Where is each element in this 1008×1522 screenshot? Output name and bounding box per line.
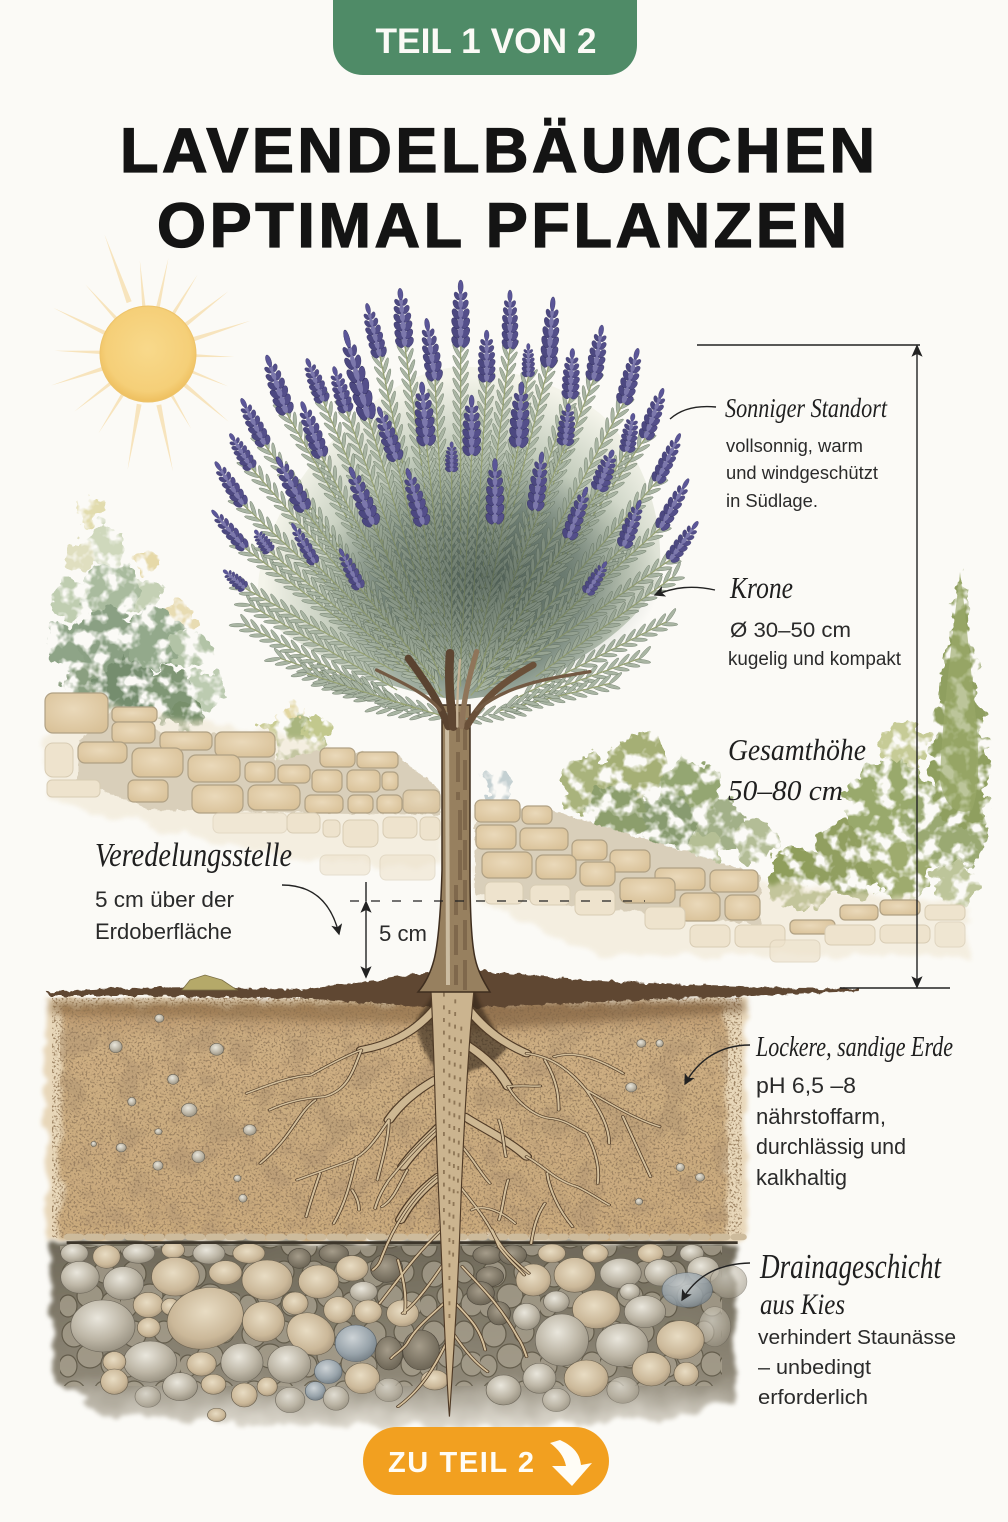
callout: Krone: kugelig und kompakt (728, 649, 902, 670)
button: Zu Teil 2: ZU TEIL 2 (388, 1447, 534, 1479)
button: Zu Teil 2 (363, 1427, 609, 1495)
callout: Gesamthöhe: Gesamthöhe (728, 732, 866, 767)
pebble divider line (67, 1237, 742, 1243)
icon: sun (50, 234, 251, 472)
callout: Gesamthöhe: 50–80 cm (728, 776, 843, 807)
callout: Sonniger Standort: Sonniger Standort (725, 393, 888, 423)
trunk (418, 705, 490, 992)
callout: Drainageschicht aus Kies (682, 1247, 956, 1409)
icon: curved arrow (550, 1440, 592, 1486)
title: OPTIMAL PFLANZEN (157, 191, 847, 261)
callout: Sonniger Standort: und windgeschützt (726, 462, 878, 483)
background: stone wall left (45, 693, 440, 880)
gravel stones (61, 1237, 747, 1422)
callout: Drainageschicht aus Kies: aus Kies (760, 1288, 845, 1321)
callout: Sonniger Standort: vollsonnig, warm (726, 435, 863, 456)
lavender crown (206, 280, 705, 729)
background: small bush (263, 704, 327, 772)
callout: Veredelungsstelle: 5 cm über der (95, 887, 234, 912)
crown foliage mass (258, 367, 660, 700)
callout: Lockere, sandige Erde: durchlässig und (756, 1134, 906, 1159)
roots (247, 953, 660, 1417)
callout: Krone: Krone (729, 570, 793, 605)
graft height marker: 5 cm: 5 cm (379, 921, 427, 946)
background: stone wall right (475, 800, 970, 962)
title (120, 116, 875, 261)
badge: Teil 1 von 2: TEIL 1 VON 2 (376, 22, 596, 61)
callout: Lockere, sandige Erde: pH 6,5 –8 (756, 1073, 856, 1098)
callout: Drainageschicht aus Kies: erforderlich (758, 1386, 868, 1409)
gravel drainage layer (48, 1237, 747, 1428)
leafy stems (226, 331, 691, 729)
callout: Drainageschicht aus Kies: verhindert Staunässe (758, 1326, 956, 1349)
title: LAVENDELBÄUMCHEN (120, 116, 875, 186)
callout: Lockere, sandige Erde (685, 1031, 953, 1190)
callout: Sonniger Standort: in Südlage. (726, 490, 818, 511)
callout: Drainageschicht aus Kies: Drainageschicht (759, 1247, 942, 1286)
callout: Veredelungsstelle: Erdoberfläche (95, 919, 232, 944)
soil layer (45, 970, 860, 1240)
woody branches (377, 652, 590, 727)
callout: Lockere, sandige Erde: nährstoffarm, (756, 1104, 886, 1129)
callout: Veredelungsstelle: Veredelungsstelle (95, 837, 292, 874)
callout: Drainageschicht aus Kies: – unbedingt (758, 1356, 871, 1379)
background: left bush (48, 496, 223, 731)
callout: Gesamthöhe (728, 732, 866, 807)
height dimension line: Gesamthöhe (697, 345, 950, 988)
callout: Krone: Ø 30–50 cm (730, 619, 851, 642)
callout: Veredelungsstelle (95, 837, 339, 944)
lavender flower spikes (206, 280, 705, 599)
soil pebbles (91, 1014, 705, 1205)
callout: Lockere, sandige Erde: Lockere, sandige Erde (755, 1031, 953, 1063)
background: right bushes and cypress (484, 570, 987, 912)
dark shaded core of the crown (313, 463, 660, 690)
badge: Teil 1 von 2 (333, 0, 637, 75)
callout: Krone (655, 570, 902, 670)
callout: Sonniger Standort (670, 393, 888, 511)
callout: Lockere, sandige Erde: kalkhaltig (756, 1165, 847, 1190)
